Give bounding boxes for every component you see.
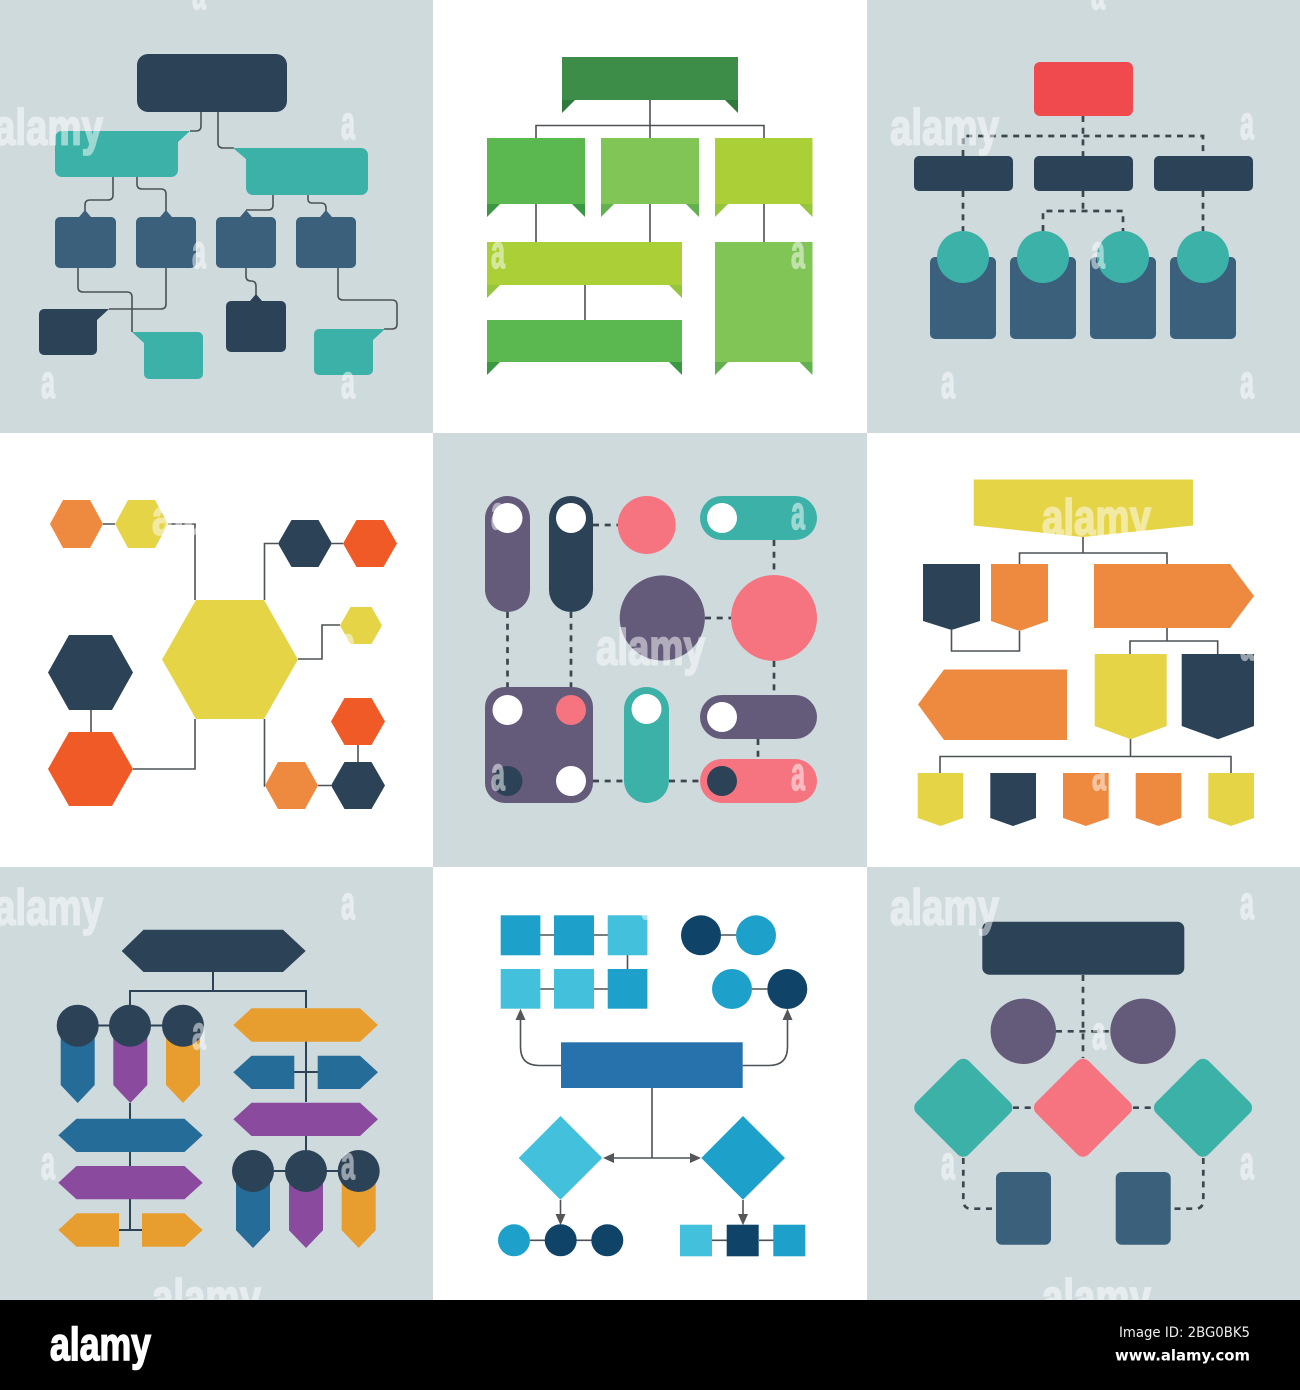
right purple tag [233, 1103, 378, 1136]
watermarks: a [341, 96, 355, 149]
arrowheads [516, 1009, 792, 1225]
large pink circle [731, 575, 817, 661]
vertical purple pill [485, 496, 530, 612]
circle pairs [681, 915, 807, 1009]
left blue tag [58, 1119, 203, 1152]
panel: red root dashed hierarchy [867, 0, 1300, 433]
watermarks: a [791, 747, 805, 800]
top ribbon [562, 57, 738, 113]
wide green ribbon [487, 320, 682, 375]
watermarks: alamy [1042, 1270, 1151, 1326]
bottom squares [680, 1225, 805, 1256]
right orange tag [233, 1008, 378, 1042]
image id: Image ID: 2BG0BK5 [1119, 1325, 1250, 1341]
dashed connectors [963, 975, 1203, 1209]
connector lines [78, 112, 397, 332]
watermarks: alamy [1042, 490, 1151, 546]
watermarks: a [941, 1136, 955, 1189]
watermarks: alamy [152, 490, 261, 546]
top right hexagons [278, 520, 397, 567]
watermarks: a [491, 225, 505, 278]
ribbon row 1 left [487, 138, 585, 217]
dashed connectors [508, 525, 774, 781]
right teal diamond [1151, 1055, 1255, 1160]
panel: tags and pennants [0, 867, 433, 1300]
navy top hexagon banner [122, 930, 306, 972]
watermarks: alamy [890, 100, 999, 156]
small shield row [918, 773, 1254, 826]
navy shield [923, 564, 980, 630]
right teal bubble [233, 148, 368, 195]
vertical navy pill [549, 496, 593, 612]
left purple tag [58, 1166, 203, 1199]
yellow large shield [1095, 654, 1167, 739]
small yellow hexagon [340, 607, 382, 644]
orange left arrow [918, 670, 1067, 740]
vertical teal pill [624, 687, 669, 803]
purple circles [991, 999, 1176, 1064]
red root node [1034, 62, 1133, 116]
dark node row [914, 156, 1253, 191]
watermarks: a [1240, 876, 1254, 929]
watermarks: a [341, 876, 355, 929]
panel: rounded speech-bubble flowchart [0, 0, 433, 433]
watermarks: a [341, 617, 355, 670]
square grid [501, 915, 647, 1009]
footer logo: alamy [50, 1318, 151, 1370]
central yellow hexagon [162, 600, 298, 719]
tall green ribbon [715, 242, 812, 375]
right pennants with circles [232, 1150, 380, 1248]
navy large shield [1182, 654, 1254, 739]
watermarks: a [1240, 1136, 1254, 1189]
watermarks: alamy [890, 880, 999, 936]
teal bubble bottom right [314, 329, 385, 375]
dark bubble bottom left [39, 309, 109, 355]
panel: pills and circles [433, 433, 867, 867]
watermarks: a [491, 747, 505, 800]
watermarks: a [341, 1136, 355, 1189]
bottom right hexagon cluster [265, 698, 385, 809]
orange shield [991, 564, 1048, 631]
watermarks: a [41, 1136, 55, 1189]
dashed connectors [963, 116, 1203, 231]
bottom circles [498, 1224, 623, 1256]
watermarks: alamy [152, 1270, 261, 1326]
connector lines [536, 100, 764, 320]
large purple circle [620, 575, 705, 661]
watermarks: a [1240, 617, 1254, 670]
dark node bottom [226, 294, 286, 352]
centre pink diamond [1031, 1055, 1135, 1160]
connector lines [94, 972, 342, 1230]
left diamond [519, 1116, 602, 1200]
watermarks: a [1240, 355, 1254, 408]
central blue rectangle [561, 1042, 743, 1088]
watermarks: alamy [596, 620, 705, 676]
small pink circle [618, 496, 676, 554]
left teal bubble [55, 131, 190, 177]
top left hexagons [50, 500, 168, 548]
left pennants with circles [57, 1005, 204, 1103]
connector lines [940, 537, 1231, 773]
wide lime ribbon [487, 242, 682, 298]
purple square with dots [485, 687, 593, 803]
watermarks: a [791, 486, 805, 539]
teal circles [937, 231, 1229, 283]
ribbon row 1 middle [601, 138, 699, 217]
left teal diamond [911, 1055, 1016, 1160]
panel: hexagon network [0, 433, 433, 867]
website: www.alamy.com [1115, 1347, 1250, 1365]
panel: shields and arrows [867, 433, 1300, 867]
watermarks: a [1092, 1006, 1106, 1059]
left orange split tags [58, 1213, 203, 1247]
watermarks: a [341, 355, 355, 408]
watermarks: a [791, 225, 805, 278]
right blue split tags [233, 1056, 378, 1089]
footer bar [0, 1300, 1300, 1390]
watermarks: a [1240, 96, 1254, 149]
connector lines [91, 524, 358, 786]
watermarks: a [491, 486, 505, 539]
panel: blue arrows flowchart [433, 867, 867, 1300]
yellow top banner [974, 480, 1193, 537]
blue cards [930, 257, 1236, 339]
ribbon row 1 right [715, 138, 812, 217]
watermarks: a [192, 225, 206, 278]
left hexagon pair [48, 635, 133, 806]
horizontal purple pill [700, 695, 817, 739]
blue node row [55, 210, 356, 268]
navy top node [982, 922, 1184, 975]
right diamond [701, 1116, 785, 1200]
watermarks: a [192, 1006, 206, 1059]
blue bottom cards [996, 1172, 1171, 1245]
watermarks: a [1092, 747, 1106, 800]
watermarks: a [641, 876, 655, 929]
watermarks: a [941, 355, 955, 408]
connector lines [520, 935, 788, 1240]
orange right arrow [1094, 564, 1254, 628]
teal bubble bottom [132, 332, 203, 379]
horizontal teal pill [700, 496, 817, 540]
horizontal pink pill [700, 759, 817, 803]
panel: green ribbon org chart [433, 0, 867, 433]
top node [137, 54, 287, 112]
watermarks: a [41, 355, 55, 408]
watermarks: a [1091, 225, 1105, 278]
panel: rounded diamonds flowchart [867, 867, 1300, 1300]
